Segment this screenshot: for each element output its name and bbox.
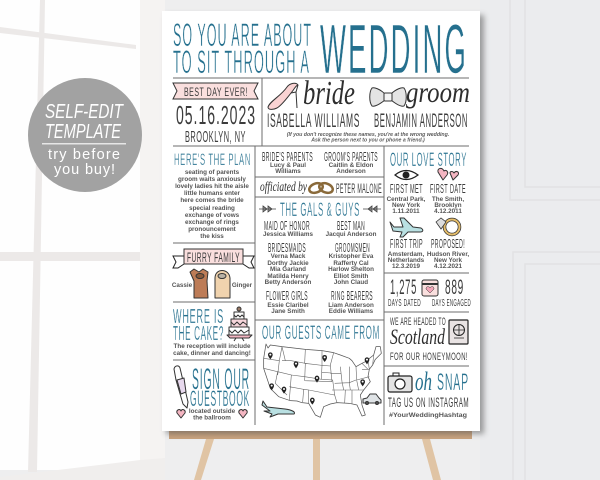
list: the kiss: [200, 233, 224, 240]
groom script: groom: [406, 76, 470, 109]
names: Cassie: [172, 282, 193, 289]
text: OUR LOVE STORY: [390, 150, 467, 171]
icon: car: [363, 394, 381, 404]
panel: love story: FIRST MET: [390, 181, 423, 196]
panel: day counts: 889: [445, 276, 464, 299]
first date: [430, 168, 466, 215]
map of the USA: [264, 344, 381, 417]
icon: bow tie: [370, 88, 406, 106]
badge: self-edit template: you buy!: [54, 162, 115, 178]
roles left: Jessica Williams: [263, 231, 313, 238]
text: SIGN OUR: [192, 363, 250, 396]
roles right: [326, 219, 377, 315]
proposed: 4.12.2021: [434, 263, 463, 270]
roles right: Jacqui Anderson: [326, 231, 377, 238]
roles left: Verna Mack: [271, 253, 306, 260]
icon: cake: [227, 307, 252, 341]
text: HERE'S THE PLAN: [174, 150, 251, 169]
icon: plane: [262, 401, 295, 417]
first met: New York: [392, 202, 421, 209]
icon: eye: [395, 170, 418, 180]
panel: day counts: [388, 276, 471, 309]
panel: guestbook: [174, 363, 250, 422]
first trip: Amsterdam,: [388, 251, 424, 258]
panel: love story: FIRST TRIP: [390, 236, 423, 251]
first date: 4.12.2011: [434, 208, 462, 215]
roles left: Matilda Henry: [267, 273, 309, 280]
badge: self-edit template: try before: [48, 147, 120, 163]
proposed: New York: [434, 257, 463, 264]
list: pronouncement: [188, 226, 237, 233]
roles right: Harlow Shelton: [328, 266, 374, 273]
bride script: bride: [303, 75, 355, 112]
icon: plane: [390, 218, 423, 237]
list: seating of parents: [185, 169, 240, 176]
panel: parents: Caitlin & Eldon: [329, 162, 374, 169]
panel: furry family: [172, 249, 254, 298]
list: [175, 169, 249, 240]
list: special reading: [189, 205, 235, 212]
list: groom waits anxiously: [178, 176, 246, 183]
note: Ask the person next to you or phone a friend.): [310, 138, 425, 144]
map pins: [268, 352, 369, 405]
text: SNAP: [437, 369, 469, 396]
icon: shoe: [268, 83, 298, 109]
text: PROPOSED!: [431, 236, 465, 251]
roles right: Elliot Smith: [334, 273, 368, 280]
board shadow: [166, 15, 484, 434]
text: PETER MALONE: [336, 181, 382, 196]
first date: Brooklyn: [434, 202, 462, 209]
panel: parents: BRIDE'S PARENTS: [262, 149, 313, 164]
list: lovely ladies hit the aisle: [175, 183, 249, 190]
icon: cat Ginger: [215, 270, 230, 298]
ornament left: [259, 206, 276, 212]
icon: cat Cassie: [190, 269, 208, 298]
list: exchange of vows: [185, 212, 240, 219]
panel: parents: Lucy & Paul: [270, 162, 306, 169]
text: RING BEARERS: [331, 289, 373, 303]
panel: honeymoon: [390, 316, 468, 363]
panel: wedding party: THE GALS & GUYS: [280, 200, 360, 221]
first trip: [388, 218, 425, 270]
roles right: Liam Anderson: [328, 302, 374, 309]
text: GROOM'S PARENTS: [324, 149, 378, 164]
panel: the plan: [174, 150, 251, 240]
panel: parents: Williams: [275, 168, 301, 175]
text: FIRST DATE: [430, 181, 466, 196]
icon: calendar: [422, 280, 438, 296]
ornament right: [363, 206, 381, 212]
panel: officiant: officiated by: [260, 180, 308, 195]
first date: The Smith,: [432, 196, 464, 203]
text: BENJAMIN ANDERSON: [374, 111, 468, 132]
list: little humans enter: [184, 190, 241, 197]
first met: [387, 170, 426, 215]
panel: honeymoon: WE ARE HEADED TO: [390, 316, 446, 328]
roles left: [263, 219, 313, 315]
badge: self-edit template: [28, 78, 142, 192]
panel: couple: ISABELLA WILLIAMS: [267, 111, 360, 132]
banner: FURRY FAMILY: [187, 249, 240, 265]
date panel: BROOKLYN, NY: [185, 129, 246, 146]
panel: honeymoon: FOR OUR HONEYMOON!: [390, 351, 468, 363]
panel: parents: Anderson: [336, 168, 366, 175]
icon: ring: [436, 218, 460, 234]
panel: officiant: [260, 180, 382, 196]
icon: rings: [308, 181, 334, 195]
roles left: Mia Garland: [270, 266, 306, 273]
text: DAYS ENGAGED: [432, 298, 471, 309]
first met: Central Park,: [387, 196, 426, 203]
icon: passport: [449, 320, 468, 344]
roles left: Betty Anderson: [265, 279, 311, 286]
first trip: Netherlands: [388, 257, 425, 264]
text: GROOMSMEN: [335, 241, 370, 255]
panel: day counts: DAYS DATED: [388, 298, 421, 309]
proposed: Hudson River,: [427, 251, 469, 258]
text: OUR GUESTS CAME FROM: [262, 322, 380, 344]
banner: best day ever: BEST DAY EVER!: [184, 85, 248, 99]
panel: instagram: [388, 367, 469, 419]
roles right: Kristopher Eva: [329, 253, 374, 260]
panel: instagram: oh: [415, 367, 432, 396]
proposed: [427, 218, 469, 270]
panel: cake: [173, 306, 252, 357]
roles right: Eddie Williams: [329, 308, 374, 315]
panel: honeymoon: Scotland: [390, 324, 446, 349]
easel: [169, 431, 472, 480]
badge: self-edit template: SELF-EDIT: [45, 101, 124, 123]
date: 05.16.2023: [176, 100, 256, 130]
panel: guests map: [262, 322, 381, 417]
text: GUESTBOOK: [190, 386, 250, 411]
panel: cake: cake, dinner and dancing!: [173, 350, 251, 357]
icon: camera: [388, 373, 412, 392]
first met: 1.11.2011: [392, 208, 420, 215]
panel: cake: WHERE IS: [173, 306, 224, 328]
roles left: Dorthy Jackie: [267, 260, 309, 267]
roles right: John Claud: [334, 279, 368, 286]
roles right: BEST MAN: [337, 219, 365, 233]
roles right: Rafferty Cal: [333, 260, 369, 267]
panel: wedding party: MAID OF HONOR: [264, 219, 310, 233]
date panel: [173, 83, 258, 146]
text: located outside: [189, 408, 236, 415]
text: The reception will include: [174, 343, 251, 350]
grid rules: [173, 78, 469, 425]
panel: wedding party: BRIDESMAIDS: [268, 241, 306, 255]
text: TAG US ON INSTAGRAM: [388, 395, 469, 410]
note: (If you don't recognize these names, you're at the wrong wedding.: [287, 132, 449, 138]
roles left: Essie Claribel: [267, 302, 309, 309]
icon: pen: [174, 366, 188, 408]
panel: furry family: Ginger: [232, 282, 253, 289]
panel: instagram: #YourWeddingHashtag: [389, 412, 467, 419]
title: [173, 10, 468, 88]
icon: heart right: [239, 410, 247, 418]
first trip: 12.3.2019: [392, 263, 421, 270]
title: TO SIT THROUGH A: [173, 44, 310, 80]
panel: guestbook: the ballroom: [193, 414, 231, 422]
poster board: [162, 11, 480, 431]
panel: wedding party: FLOWER GIRLS: [266, 289, 308, 303]
panel: day counts: 1,275: [390, 276, 417, 299]
note: [287, 132, 449, 144]
title: SO YOU ARE ABOUT: [173, 17, 312, 53]
roles left: Jane Smith: [271, 308, 305, 315]
panel: love story: [387, 150, 469, 270]
panel: parents: [262, 149, 378, 175]
badge: self-edit template: TEMPLATE: [45, 121, 121, 143]
list: exchange of rings: [185, 219, 239, 226]
icon: heart left: [177, 410, 185, 418]
panel: wedding party: [259, 200, 381, 315]
panel: cake: THE CAKE?: [173, 323, 224, 345]
icon: hearts: [438, 168, 459, 180]
panel: couple: [267, 75, 470, 144]
list: here comes the bride: [180, 197, 244, 204]
